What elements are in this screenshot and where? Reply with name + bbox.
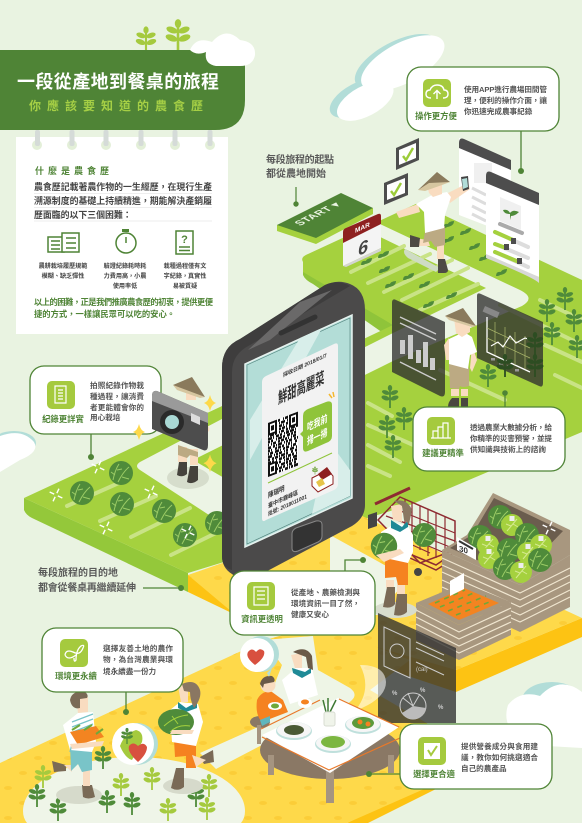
shopping cart bbox=[375, 488, 455, 576]
boots bbox=[171, 750, 214, 790]
callout: more detailed records: 者更能體會你的 bbox=[90, 402, 144, 412]
connector to choice callout bbox=[366, 771, 400, 777]
difficulty captions: 農耕栽培履歷規範 bbox=[39, 262, 87, 270]
steam bbox=[354, 665, 386, 712]
glass with plant bbox=[323, 698, 336, 726]
carrots bbox=[70, 726, 104, 745]
callout: more detailed records: 紀錄更詳實 bbox=[42, 414, 85, 424]
callout: more transparent information: 從產地、農藥檢測與 bbox=[291, 587, 360, 597]
callout: better choice: 提供營養成分與食用建 bbox=[461, 741, 538, 751]
START sign: START ▾ bbox=[292, 201, 344, 227]
scan bubble: 掃一掃 bbox=[307, 425, 327, 447]
speaker bbox=[281, 317, 315, 333]
callout: more transparent information bbox=[230, 571, 375, 635]
callout: more sustainable environment: 選擇友善土地的農作 bbox=[103, 643, 173, 653]
cloud: upper middle bbox=[315, 23, 458, 129]
forearm bbox=[170, 730, 194, 734]
seedlings on top field bbox=[361, 221, 507, 308]
table cloth bbox=[262, 698, 399, 773]
calendar bbox=[343, 214, 381, 267]
icon: bar graph bbox=[427, 417, 455, 445]
ground shadow bbox=[167, 467, 209, 489]
forearm bbox=[376, 549, 404, 562]
callout: more detailed records: 用心栽培 bbox=[90, 412, 121, 422]
callout: more accurate advice bbox=[413, 407, 565, 471]
difficulty captions: 模糊、缺乏彈性 bbox=[42, 272, 84, 280]
callout: easier operation: 操作更方便 bbox=[415, 111, 458, 121]
panel: what is food traceability bbox=[16, 130, 228, 334]
closing statement bbox=[34, 297, 214, 319]
connector to record callout bbox=[88, 434, 94, 460]
difficulty captions: 字紀錄，真實性 bbox=[164, 272, 206, 280]
price tag: 30 bbox=[459, 544, 468, 556]
callout: easier operation bbox=[407, 67, 559, 131]
sparkle stars bbox=[133, 395, 217, 472]
icon: document bbox=[47, 381, 75, 409]
callout: more accurate advice: 你精準的災害預警，並提 bbox=[470, 433, 552, 443]
destination note bbox=[38, 566, 184, 594]
farmer with phone bbox=[396, 172, 470, 273]
banner cloud bbox=[190, 33, 255, 66]
head and hair bbox=[76, 697, 88, 713]
shirt bbox=[416, 192, 451, 233]
destination note: 都會從餐桌再繼續延伸 bbox=[38, 581, 136, 594]
analytics panel: line chart bbox=[477, 293, 544, 387]
pale road across the field bbox=[137, 224, 529, 530]
held cabbage bbox=[158, 709, 194, 735]
ground shadow bbox=[163, 778, 203, 794]
callout: more transparent information: 資訊更透明 bbox=[241, 614, 283, 624]
check boxes bbox=[384, 138, 419, 205]
shorts bbox=[423, 226, 445, 247]
callout: more detailed records: 拍照紀錄作物栽 bbox=[90, 380, 144, 390]
taiwan heart emblem bbox=[112, 723, 158, 765]
intro paragraph bbox=[34, 181, 212, 221]
calendar: MAR bbox=[355, 222, 370, 235]
boy with carrots bbox=[52, 692, 104, 804]
callout: more detailed records bbox=[30, 366, 161, 434]
screen shine bbox=[250, 328, 350, 514]
kid at table bbox=[250, 676, 288, 744]
scan bubble: 吃我前 bbox=[307, 411, 327, 433]
callout: more sustainable environment: 環境更永續 bbox=[55, 671, 98, 681]
legs and boots bbox=[178, 447, 198, 465]
start note: 都從農地開始 bbox=[266, 167, 326, 180]
main title: 一段從產地到餐桌的旅程 bbox=[17, 71, 219, 92]
connector to info callout bbox=[345, 557, 366, 571]
title banner bbox=[0, 19, 255, 130]
divider line bbox=[268, 453, 332, 483]
farm stall icon bbox=[312, 466, 333, 492]
callout: more sustainable environment: 物，為台灣農業與環 bbox=[103, 654, 173, 664]
icon: question sheet: ? bbox=[181, 234, 188, 246]
pie chart: % bbox=[438, 705, 444, 711]
intro paragraph: 歷面臨的以下三個困難： bbox=[34, 209, 132, 220]
connector to sustainability callout bbox=[123, 692, 129, 715]
held cabbage bbox=[371, 533, 397, 559]
boots and legs bbox=[52, 761, 95, 798]
hand bbox=[202, 426, 210, 432]
farm details: 批號: 2018011001 bbox=[268, 492, 307, 518]
app screen panel: back bbox=[459, 138, 511, 235]
icon: information sheet bbox=[247, 582, 275, 610]
callout: better choice bbox=[400, 724, 552, 789]
white sign bbox=[450, 573, 464, 596]
icon: stopwatch bbox=[116, 229, 136, 253]
mother at table bbox=[282, 649, 318, 708]
panel heading: 什麼是農食歷 bbox=[35, 165, 109, 176]
home button bbox=[292, 521, 322, 552]
farmer with camera bbox=[152, 377, 210, 489]
start note bbox=[266, 153, 334, 207]
bottom plants bbox=[28, 746, 218, 821]
plants on the lower field bbox=[378, 287, 582, 458]
table base bbox=[260, 721, 400, 779]
cloud: lower right bbox=[506, 682, 582, 748]
pie chart: % bbox=[392, 691, 398, 697]
QR code bbox=[268, 412, 298, 477]
difficulty captions: 力費用高，小農 bbox=[104, 272, 146, 280]
callout: more accurate advice: 供知識與技術上的諮詢 bbox=[470, 444, 546, 454]
callout: easier operation: 使用APP進行農場田間管 bbox=[464, 84, 547, 94]
farmer between panels bbox=[444, 308, 477, 407]
tablet bbox=[368, 512, 377, 529]
callout: more detailed records: 種過程，讓消費 bbox=[90, 391, 144, 401]
collar bbox=[178, 702, 197, 712]
START sign bbox=[277, 193, 373, 244]
ground shadow bbox=[56, 786, 102, 804]
phone body bbox=[222, 282, 365, 579]
scan bubble bbox=[300, 401, 332, 452]
hat bbox=[173, 377, 205, 397]
screen bbox=[245, 315, 352, 547]
product card bbox=[262, 343, 338, 521]
pale road around the table bbox=[200, 636, 355, 769]
shadow bbox=[404, 249, 440, 272]
arms bbox=[70, 741, 104, 749]
callout: more accurate advice: 建議更精準 bbox=[422, 448, 465, 458]
orange shorts bbox=[385, 558, 408, 585]
callout: easier operation: 你迅速完成農事紀錄 bbox=[464, 106, 533, 116]
yellow path: upper plane bbox=[188, 515, 582, 692]
cabbages in left field bbox=[47, 458, 229, 547]
farm details: 臺中市霧峰區 bbox=[268, 488, 298, 510]
farm details bbox=[268, 483, 307, 518]
callout: more accurate advice: 透過農業大數據分析，給 bbox=[470, 422, 552, 432]
difficulty captions: 驗證紀錄耗時耗 bbox=[104, 262, 146, 270]
orange shorts bbox=[174, 740, 196, 768]
closing statement: 以上的困難，正是我們推廣農食歷的初衷，提供更便 bbox=[34, 297, 214, 307]
plants above banner bbox=[135, 19, 191, 54]
connector to advice callout bbox=[502, 390, 508, 407]
legs and boots bbox=[414, 238, 444, 259]
callout: more sustainable environment bbox=[42, 628, 183, 692]
difficulty captions: 栽種過程僅有文 bbox=[164, 262, 206, 270]
globe frame: (cal) bbox=[416, 667, 428, 673]
plates of food bbox=[276, 716, 381, 753]
harvest date: 採收日期 2018/01/7 bbox=[283, 351, 327, 379]
callout: better choice: 自己的農產品 bbox=[461, 763, 507, 773]
green field: top and middle bbox=[24, 203, 582, 592]
binder rings bbox=[32, 130, 215, 150]
subtitle: 你應該要知道的農食歷 bbox=[29, 98, 203, 113]
boots bbox=[383, 587, 407, 616]
callout: better choice: 選擇更合適 bbox=[413, 769, 456, 779]
start note: 每段旅程的起點 bbox=[266, 153, 334, 166]
price tag bbox=[457, 537, 476, 560]
hair bbox=[182, 682, 200, 708]
difficulty captions bbox=[39, 262, 206, 290]
face bbox=[178, 684, 188, 702]
icon: cloud upload bbox=[423, 79, 451, 107]
phone in hand bbox=[461, 176, 469, 191]
destination note: 每段旅程的目的地 bbox=[38, 566, 118, 579]
pale road under the shopper bbox=[330, 535, 408, 615]
dark nutrition panel bbox=[378, 613, 456, 723]
icon: ribbon loop bbox=[60, 639, 88, 667]
ground shadow bbox=[373, 602, 417, 618]
shorts bbox=[70, 745, 92, 772]
shirt bbox=[381, 523, 413, 563]
arms bbox=[396, 183, 470, 218]
intro paragraph: 溯源制度的基礎上持續精進，期能解決產銷履 bbox=[34, 195, 212, 206]
shirt bbox=[170, 702, 203, 746]
calendar: 6 bbox=[358, 236, 368, 261]
girl with cabbage bbox=[158, 682, 214, 794]
cabbages in crate bbox=[468, 505, 558, 583]
smartphone bbox=[222, 282, 365, 579]
callout: more transparent information: 健康又安心 bbox=[291, 609, 329, 619]
intro paragraph: 農食歷記載著農作物的一生經歷，在現行生產 bbox=[34, 181, 212, 192]
app callout connector bbox=[518, 131, 524, 174]
tap marks bbox=[329, 392, 334, 398]
analytics panel: bar chart bbox=[392, 299, 445, 396]
field rows bbox=[67, 246, 582, 555]
face and hair bbox=[391, 504, 402, 522]
callout: easier operation: 理，便利的操作介面，讓 bbox=[464, 95, 547, 105]
camera bbox=[152, 391, 208, 450]
app screen panel: front bbox=[486, 172, 539, 283]
head bbox=[427, 182, 442, 197]
small stacked crate bbox=[416, 602, 511, 660]
difficulty captions: 易被質疑 bbox=[173, 282, 197, 290]
difficulty captions: 使用率低 bbox=[113, 282, 137, 290]
large stacked crate bbox=[442, 550, 570, 632]
legs bbox=[386, 580, 405, 595]
shirt bbox=[63, 712, 96, 752]
shopper with cabbage bbox=[368, 500, 417, 618]
hat bbox=[418, 172, 450, 190]
icon: check sheet bbox=[418, 737, 446, 765]
heart speech bubble bbox=[240, 636, 279, 677]
yellow path: lower plane bbox=[0, 625, 490, 823]
callout: more transparent information: 環境資訊一目了然， bbox=[291, 598, 360, 608]
callout: better choice: 議，教你如何挑選適合 bbox=[461, 752, 538, 762]
dining table bbox=[260, 698, 400, 803]
pie chart bbox=[392, 688, 444, 719]
icon: question sheet bbox=[176, 231, 193, 254]
product name: 鮮甜高麗菜 bbox=[278, 367, 324, 408]
collar bbox=[391, 520, 408, 532]
callout: more sustainable environment: 境永續盡一份力 bbox=[103, 666, 156, 676]
icon: open book bbox=[48, 233, 79, 252]
head bbox=[186, 390, 196, 400]
cloud: left edge bbox=[0, 431, 36, 472]
market stall bbox=[416, 493, 570, 660]
farm details: 陳瑞明 bbox=[268, 483, 285, 500]
pie chart: % bbox=[420, 688, 426, 694]
closing statement: 捷的方式，一樣讓民眾可以吃的安心。 bbox=[34, 309, 175, 319]
pale oval clearing bbox=[23, 757, 245, 823]
